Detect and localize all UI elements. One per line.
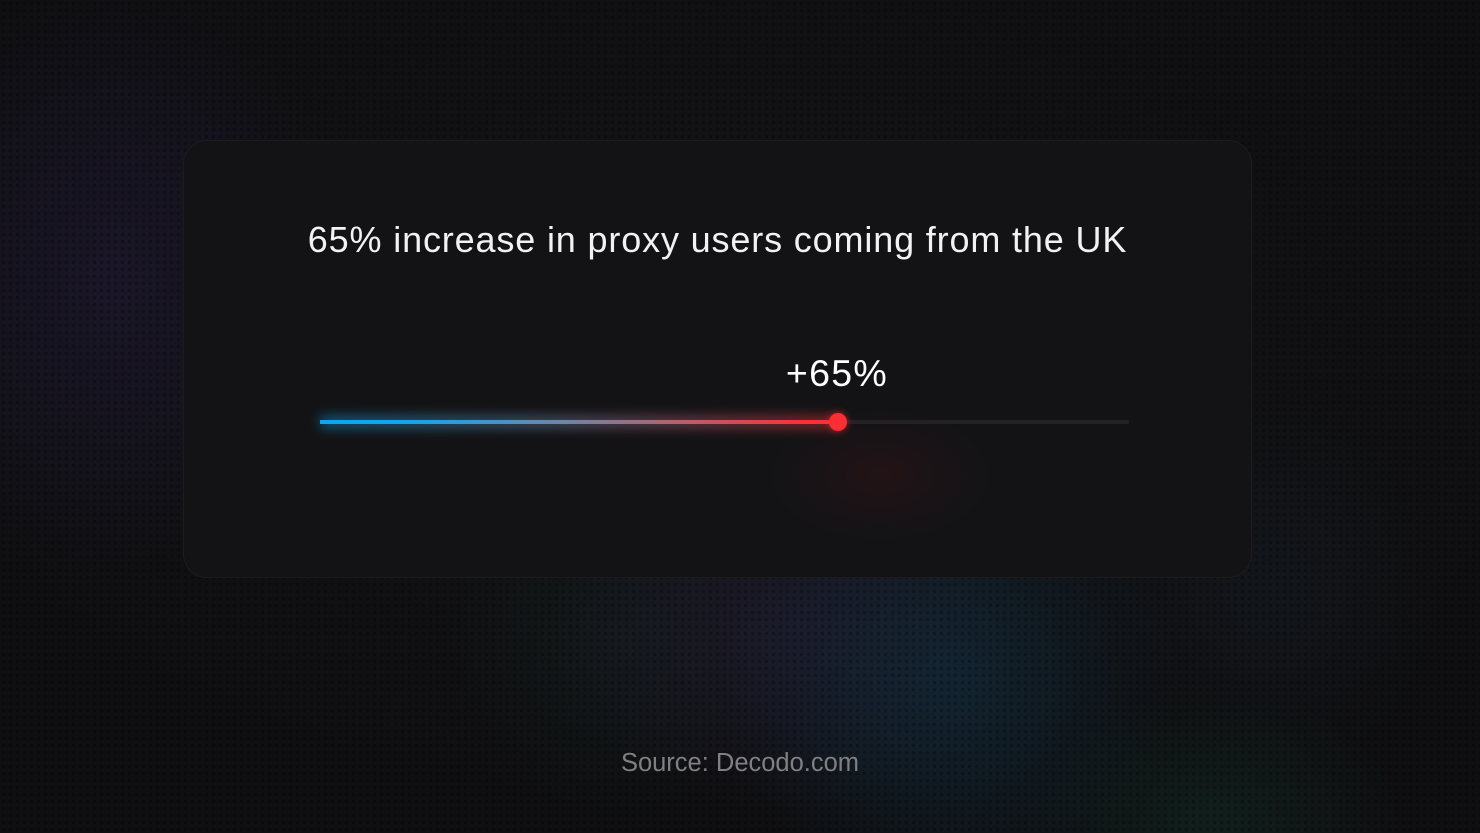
bar end marker (829, 413, 847, 431)
title: 65% increase in proxy users coming from the UK (308, 219, 1127, 260)
bar fill gradient (320, 420, 838, 424)
red glow under the progress marker (770, 410, 990, 540)
source note: Source: Decodo.com (621, 749, 859, 777)
bar fill glow (320, 416, 838, 428)
value label: +65%: +65% (786, 352, 888, 394)
panel: stat card (183, 140, 1252, 578)
progress bar chart (313, 407, 1129, 437)
bar track (840, 420, 1129, 424)
